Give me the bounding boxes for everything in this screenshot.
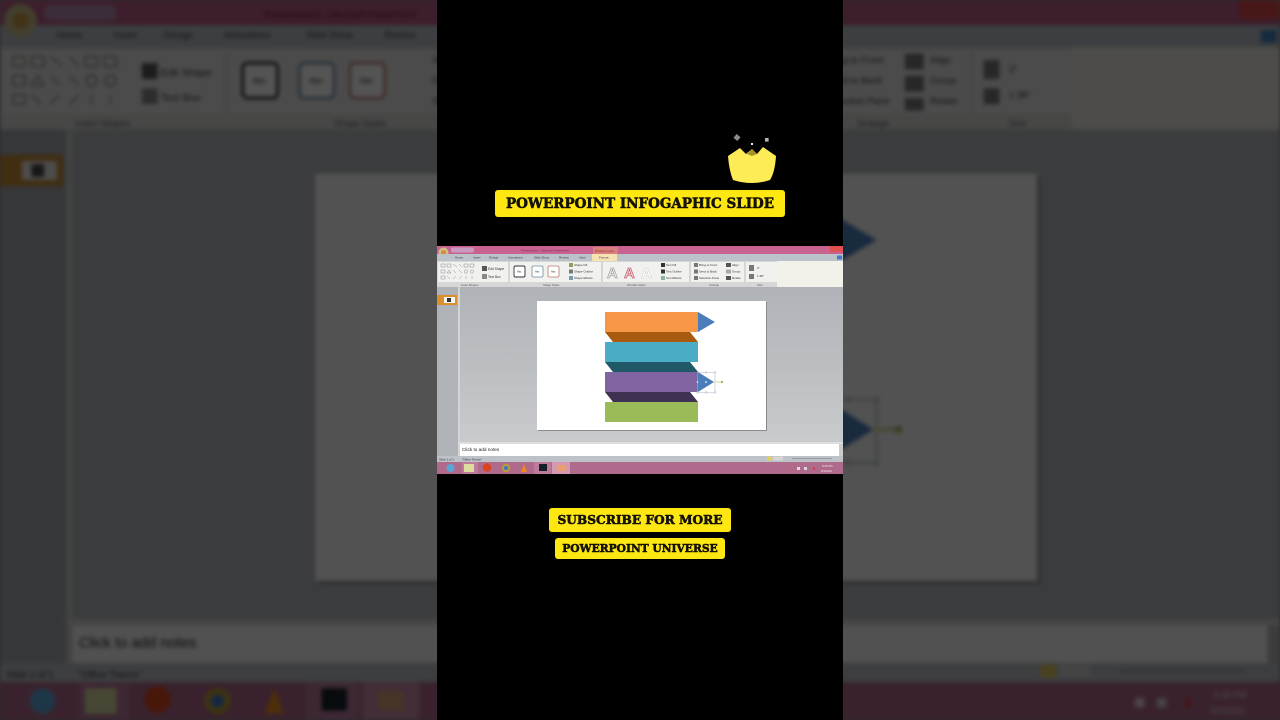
ribbon panel: Insert Shapes (461, 283, 479, 287)
ribbon panel: Text Outline (666, 270, 682, 274)
screenshot: PowerPoint window with 3D stacked bars (437, 246, 843, 474)
background: blurred darkened PowerPoint window: Arrange (858, 118, 889, 128)
background: blurred darkened PowerPoint window: Text Box (161, 93, 201, 104)
background: blurred darkened PowerPoint window: View (448, 30, 468, 41)
ribbon panel: Align (732, 263, 739, 267)
background: blurred darkened PowerPoint window: Selection Pane (826, 96, 890, 107)
title bar: Drawing Tools (595, 249, 614, 253)
ribbon panel: Send to Back (699, 270, 717, 274)
ribbon tabs: Design (489, 256, 499, 260)
call to action: subscribe (549, 508, 731, 532)
ribbon panel: Text Effects (666, 276, 682, 280)
background: blurred darkened PowerPoint window: 9/4/2022 (1211, 706, 1245, 716)
arrow: top blue triangle (698, 312, 715, 332)
background: blurred darkened PowerPoint window: Click to add notes (79, 635, 196, 651)
background: blurred darkened PowerPoint window: 2" (1009, 65, 1017, 76)
background: blurred darkened PowerPoint window: Insert (113, 30, 137, 41)
background: blurred darkened PowerPoint window: Insert Shapes (76, 118, 131, 128)
infographic: stacked 3D bars (605, 312, 723, 422)
title bar: Presentation1 - Microsoft PowerPoint (521, 248, 569, 252)
status bar (437, 456, 843, 462)
background: blurred darkened PowerPoint window: Align (930, 55, 951, 66)
taskbar with app icons (437, 462, 843, 474)
background: blurred darkened PowerPoint window: Presentation1 - Microsoft PowerPoint (265, 9, 416, 19)
ribbon panel: Size (757, 283, 763, 287)
ribbon panel: Shape Fill (574, 263, 588, 267)
background: blurred darkened PowerPoint window: Shape Styles (334, 118, 387, 128)
ribbon panel: Edit Shape (488, 267, 504, 271)
background: blurred darkened PowerPoint window: WordArt Styles (599, 118, 658, 128)
fold: dark teal (605, 362, 698, 372)
ribbon panel: Selection Pane (699, 276, 720, 280)
ribbon panel: Shape Outline (574, 270, 593, 274)
background: blurred darkened PowerPoint window: Text Fill (722, 55, 754, 66)
background: blurred darkened PowerPoint window: Home (57, 30, 82, 41)
ribbon tabs: View (579, 256, 586, 260)
icon: yellow crown with sparkles (728, 134, 776, 183)
background: blurred darkened PowerPoint window: Slide 1 of 1 (6, 669, 54, 680)
bar: teal (605, 342, 698, 362)
call to action: subscribe: SUBSCRIBE FOR MORE (557, 513, 723, 527)
slide canvas (537, 301, 767, 431)
background: blurred darkened PowerPoint window: Shape Fill (432, 55, 474, 66)
bar: orange (605, 312, 698, 332)
ribbon panel: Text Box (488, 275, 501, 279)
background: blurred darkened PowerPoint window: Text Effects (722, 96, 771, 107)
bar: green (605, 402, 698, 422)
call to action: channel name (555, 538, 725, 559)
background: blurred darkened PowerPoint window: Edit Shape (161, 68, 212, 79)
ribbon panel: Abc (551, 270, 556, 274)
ribbon tabs (437, 254, 843, 261)
background: blurred darkened PowerPoint window: Bring to Front (826, 55, 884, 66)
ribbon tabs: Insert (473, 256, 481, 260)
background: blurred darkened PowerPoint window: Review (385, 30, 416, 41)
background: blurred darkened PowerPoint window: Shape Outline (432, 76, 492, 87)
status bar: Slide 1 of 1 (439, 458, 454, 462)
background: blurred darkened PowerPoint window: Text Outline (722, 76, 772, 87)
taskbar with app icons: 8:35 PM (822, 464, 833, 468)
background: blurred darkened PowerPoint window: Rotate (930, 96, 958, 107)
fold: dark purple (605, 392, 698, 402)
title bar (437, 246, 843, 258)
ribbon panel: A (607, 265, 618, 282)
call to action: channel name: POWERPOINT UNIVERSE (562, 542, 718, 555)
ribbon panel: 1.38" (757, 274, 764, 278)
background: blurred darkened PowerPoint window: Abc (359, 77, 374, 86)
ribbon panel: Bring to Front (699, 263, 717, 267)
background: blurred darkened PowerPoint window: Shape Effects (432, 96, 491, 107)
background: blurred darkened PowerPoint window: 1.38" (1009, 90, 1031, 101)
background: blurred darkened PowerPoint window: "Office Theme" (79, 669, 142, 680)
background: blurred darkened PowerPoint window: Send to Back (826, 76, 882, 87)
fold: brown (605, 332, 698, 342)
title banner (495, 190, 785, 217)
ribbon panel: A (624, 265, 635, 282)
ribbon panel: WordArt Styles (627, 283, 646, 287)
ribbon panel: A (641, 265, 652, 282)
ribbon tabs: Slide Show (534, 256, 550, 260)
ribbon tabs: Animations (508, 256, 523, 260)
ribbon panel: Arrange (709, 283, 719, 287)
ribbon panel: Shape Styles (543, 283, 560, 287)
background: blurred darkened PowerPoint window: Group (930, 76, 956, 87)
background: blurred darkened PowerPoint window: Slide Show (306, 30, 353, 41)
background: blurred darkened PowerPoint window: Animations (224, 30, 271, 41)
ribbon tabs: Home (455, 256, 463, 260)
ribbon tabs: Review (559, 256, 570, 260)
ribbon panel: Shape Effects (574, 276, 593, 280)
slide pane with thumbnail (437, 287, 460, 456)
ribbon panel: Abc (517, 270, 522, 274)
notes pane: Click to add notes (462, 447, 500, 452)
notes pane (458, 442, 843, 456)
bar: purple (605, 372, 698, 392)
background: blurred darkened PowerPoint window: Design (164, 30, 193, 41)
ribbon panel: Rotate (732, 276, 741, 280)
background: blurred darkened PowerPoint window: 8:35 PM (1214, 690, 1247, 700)
ribbon panel: 2" (757, 266, 760, 270)
background: blurred darkened PowerPoint window: Abc (252, 77, 266, 86)
taskbar with app icons: 9/4/2022 (821, 469, 832, 473)
background: blurred darkened PowerPoint window: Abc (309, 77, 323, 86)
arrow: selected blue triangle with handles (696, 372, 723, 394)
ribbon panel: Abc (535, 270, 540, 274)
background: blurred darkened PowerPoint window: Size (1009, 118, 1026, 128)
ribbon panel (437, 261, 843, 287)
title banner: POWERPOINT INFOGAPHIC SLIDE (506, 196, 774, 212)
status bar: "Office Theme" (462, 458, 482, 462)
ribbon panel: Text Fill (666, 263, 677, 267)
center black vertical video column (437, 0, 843, 720)
ribbon panel: Group (732, 270, 741, 274)
ribbon tabs: Format (599, 256, 609, 260)
